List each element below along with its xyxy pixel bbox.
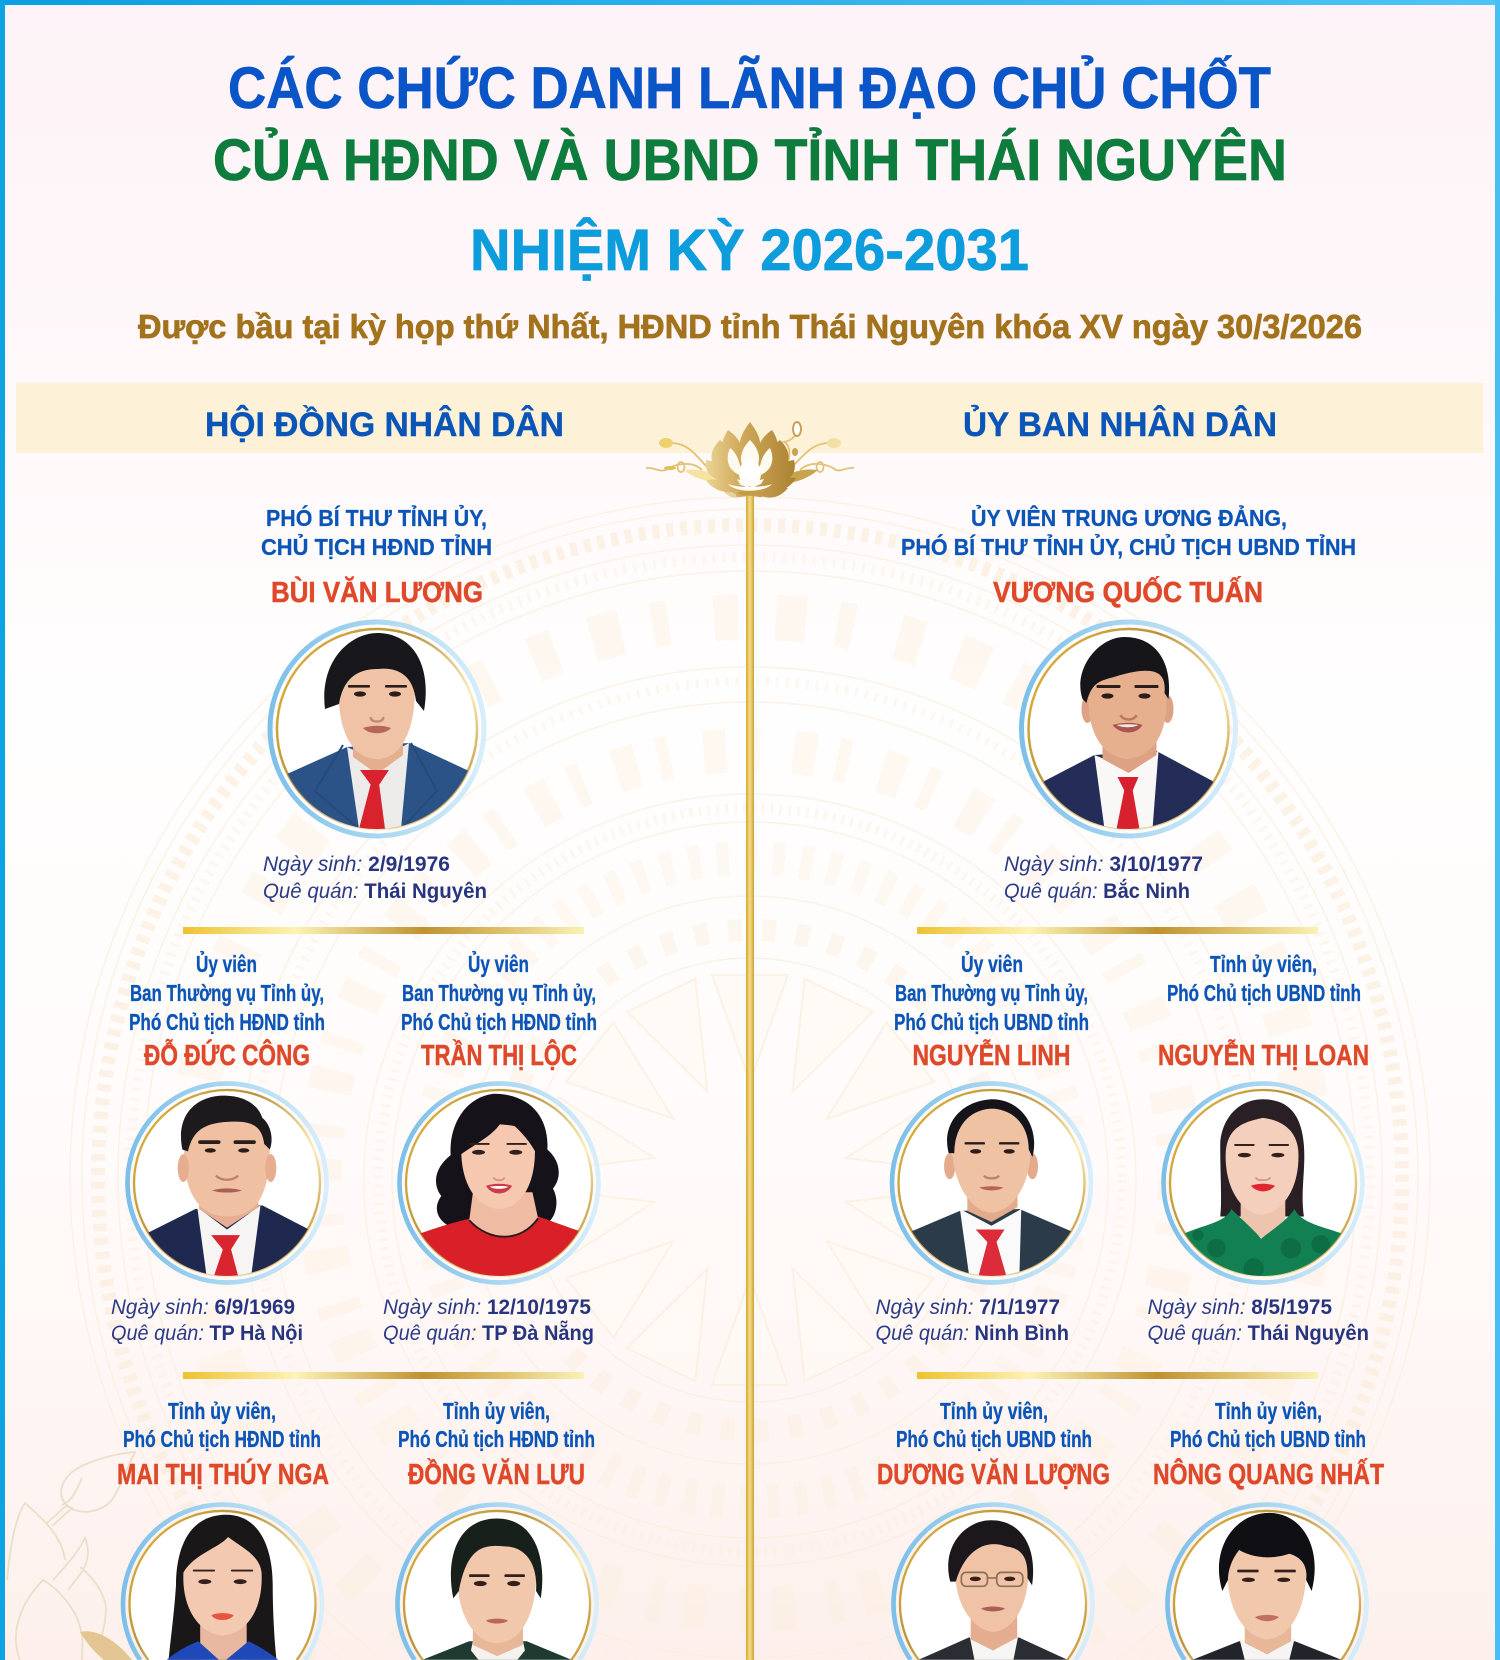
role xyxy=(901,503,1356,560)
role: Tỉnh ủy viên, xyxy=(168,1398,276,1424)
heading: HĐND: HỘI ĐỒNG NHÂN DÂN xyxy=(205,405,564,444)
birth date and hometown: Ngày sinh: 3/10/1977 xyxy=(1004,852,1203,876)
portrait xyxy=(893,1505,1093,1660)
role xyxy=(894,949,1089,1035)
faint lotus corner decoration xyxy=(7,1452,135,1660)
person: Trần Thị Lộc xyxy=(383,949,601,1345)
role: CHỦ TỊCH HĐND TỈNH xyxy=(261,532,492,560)
role: ỦY VIÊN TRUNG ƯƠNG ĐẢNG, xyxy=(971,503,1287,531)
portrait xyxy=(889,1083,1094,1285)
divider xyxy=(183,1372,584,1379)
divider xyxy=(917,927,1318,934)
birth date and hometown: Quê quán: Bắc Ninh xyxy=(1004,878,1190,903)
name: VƯƠNG QUỐC TUẤN xyxy=(993,575,1263,609)
person: Nông Quang Nhất xyxy=(1153,1398,1384,1660)
subtitle: Được bầu tại kỳ họp thứ Nhất, HĐND tỉnh Thái Nguyên khóa XV ngày 30/3/2026 xyxy=(138,308,1362,345)
section header band xyxy=(16,383,1483,453)
role: Phó Chủ tịch UBND tỉnh xyxy=(1167,980,1361,1006)
person: Bùi Văn Lương xyxy=(261,503,492,903)
role xyxy=(398,1398,595,1452)
name: NÔNG QUANG NHẤT xyxy=(1153,1457,1384,1491)
role: PHÓ BÍ THƯ TỈNH ỦY, CHỦ TỊCH UBND TỈNH xyxy=(901,532,1356,560)
portrait xyxy=(123,1505,322,1660)
role: Ủy viên xyxy=(196,949,257,977)
name: ĐỒNG VĂN LƯU xyxy=(408,1457,585,1491)
birth date and hometown: Ngày sinh: 2/9/1976 xyxy=(263,852,450,876)
birth date and hometown: Quê quán: Thái Nguyên xyxy=(1148,1321,1369,1345)
title line 3: NHIỆM KỲ 2026-2031 xyxy=(470,218,1029,283)
role xyxy=(129,949,325,1035)
role: Ban Thường vụ Tỉnh ủy, xyxy=(130,980,324,1006)
name: NGUYỄN THỊ LOAN xyxy=(1158,1038,1369,1072)
role xyxy=(401,949,597,1035)
panel: Ủy ban nhân dân xyxy=(876,503,1384,1660)
birth date and hometown: Quê quán: Thái Nguyên xyxy=(263,879,487,903)
name: NGUYỄN LINH xyxy=(912,1038,1070,1072)
icon: gold lotus xyxy=(646,422,854,498)
birth date and hometown xyxy=(263,852,487,903)
role: Tỉnh ủy viên, xyxy=(940,1398,1048,1424)
role: Phó Chủ tịch HĐND tỉnh xyxy=(401,1009,597,1035)
role: Ủy viên xyxy=(961,949,1023,977)
role: Ủy viên xyxy=(468,949,529,977)
birth date and hometown: Quê quán: TP Hà Nội xyxy=(111,1321,303,1345)
portrait xyxy=(1167,1505,1367,1660)
divider xyxy=(183,927,584,934)
person: Dương Văn Lượng xyxy=(877,1398,1110,1660)
role: Tỉnh ủy viên, xyxy=(443,1398,550,1424)
portrait xyxy=(1018,622,1238,839)
role: Phó Chủ tịch UBND tỉnh xyxy=(1170,1426,1366,1452)
role: Phó Chủ tịch HĐND tỉnh xyxy=(129,1009,325,1035)
role: Tỉnh ủy viên, xyxy=(1210,951,1317,977)
role: Phó Chủ tịch UBND tỉnh xyxy=(894,1009,1089,1035)
birth date and hometown: Ngày sinh: 7/1/1977 xyxy=(876,1295,1060,1319)
title line 1: CÁC CHỨC DANH LÃNH ĐẠO CHỦ CHỐT xyxy=(228,56,1271,121)
person: Đồng Văn Lưu xyxy=(397,1398,597,1660)
person: Mai Thị Thúy Nga xyxy=(117,1398,329,1660)
role xyxy=(896,1398,1092,1452)
portrait xyxy=(397,1505,597,1660)
name: DƯƠNG VĂN LƯỢNG xyxy=(877,1458,1110,1491)
role: Ban Thường vụ Tỉnh ủy, xyxy=(895,980,1088,1006)
title line 2: CỦA HĐND VÀ UBND TỈNH THÁI NGUYÊN xyxy=(213,128,1287,193)
name: TRẦN THỊ LỘC xyxy=(421,1038,577,1072)
heading: UBND: ỦY BAN NHÂN DÂN xyxy=(963,406,1277,444)
portrait xyxy=(1161,1083,1365,1285)
role: Tỉnh ủy viên, xyxy=(1215,1398,1322,1424)
title xyxy=(138,56,1362,345)
person: Nguyễn Thị Loan xyxy=(1148,951,1369,1345)
divider xyxy=(917,1372,1318,1379)
birth date and hometown xyxy=(876,1295,1069,1345)
panel: Hội đồng nhân dân xyxy=(111,503,601,1660)
person: Đỗ Đức Công xyxy=(111,949,329,1345)
name: ĐỖ ĐỨC CÔNG xyxy=(144,1038,310,1072)
birth date and hometown xyxy=(111,1295,303,1345)
birth date and hometown xyxy=(1004,852,1203,903)
birth date and hometown: Ngày sinh: 6/9/1969 xyxy=(111,1295,295,1319)
name: MAI THỊ THÚY NGA xyxy=(117,1457,329,1491)
role: PHÓ BÍ THƯ TỈNH ỦY, xyxy=(266,503,487,531)
person: Nguyễn Linh xyxy=(876,949,1094,1345)
portrait xyxy=(125,1083,329,1285)
birth date and hometown: Ngày sinh: 8/5/1975 xyxy=(1148,1295,1332,1319)
role: Ban Thường vụ Tỉnh ủy, xyxy=(402,980,596,1006)
role xyxy=(123,1398,321,1452)
name: BÙI VĂN LƯƠNG xyxy=(271,575,483,609)
birth date and hometown: Ngày sinh: 12/10/1975 xyxy=(383,1295,591,1319)
role xyxy=(1167,951,1361,1006)
birth date and hometown xyxy=(383,1295,594,1345)
birth date and hometown xyxy=(1148,1295,1369,1345)
role xyxy=(261,503,492,560)
portrait xyxy=(397,1083,601,1285)
person: Vương Quốc Tuấn xyxy=(901,503,1356,903)
bronze drum watermark xyxy=(70,497,1430,1660)
central divider line xyxy=(746,490,754,1660)
role: Phó Chủ tịch UBND tỉnh xyxy=(896,1426,1092,1452)
role xyxy=(1170,1398,1366,1452)
role: Phó Chủ tịch HĐND tỉnh xyxy=(123,1426,321,1452)
portrait xyxy=(267,622,487,839)
role: Phó Chủ tịch HĐND tỉnh xyxy=(398,1426,595,1452)
birth date and hometown: Quê quán: Ninh Bình xyxy=(876,1321,1069,1345)
birth date and hometown: Quê quán: TP Đà Nẵng xyxy=(383,1320,594,1345)
